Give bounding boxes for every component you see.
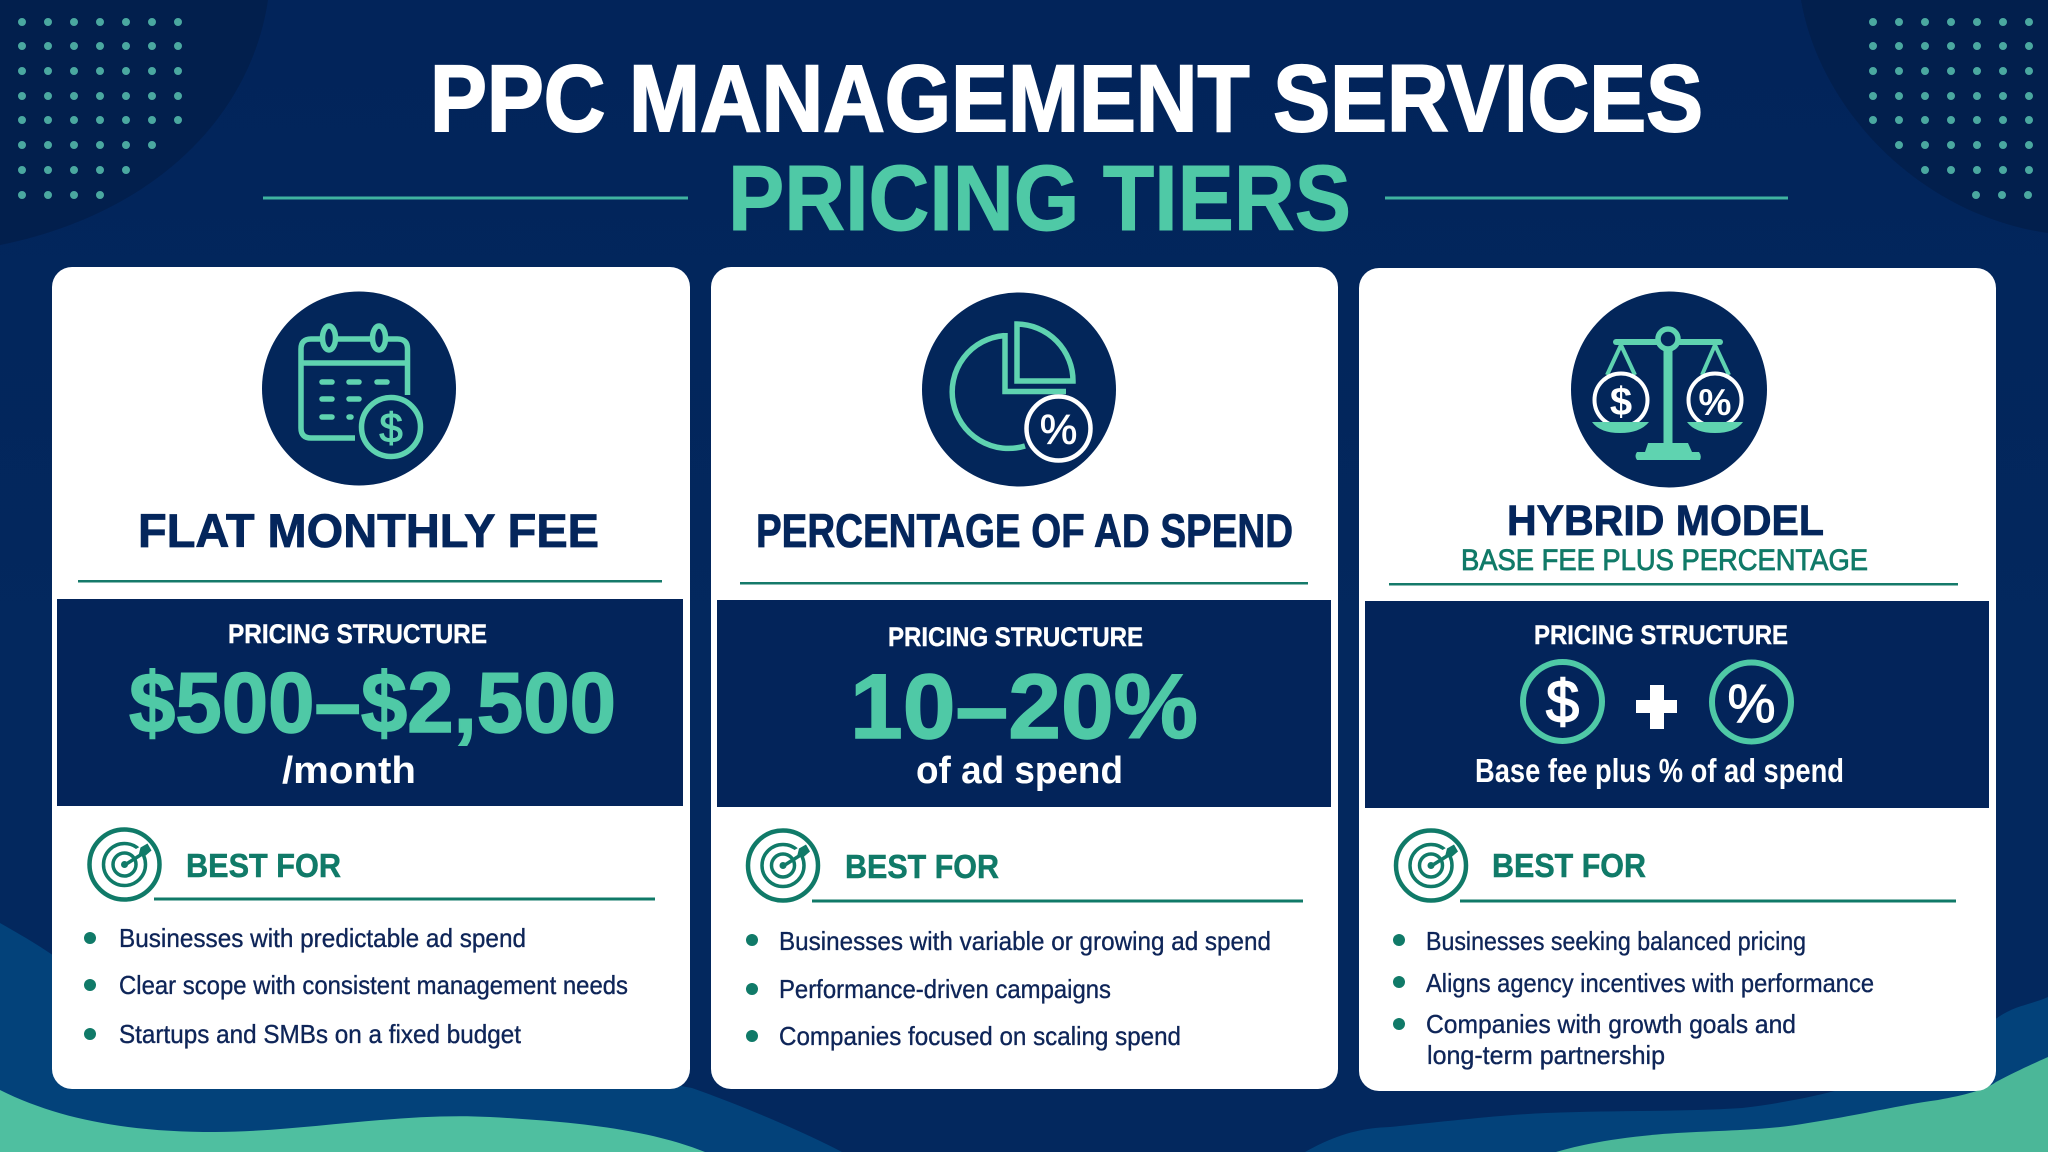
bullet list	[84, 923, 628, 1049]
pricing band: of ad spend	[916, 750, 1123, 792]
icon: plus	[1636, 685, 1677, 729]
card background	[1359, 268, 1996, 1091]
best for rule	[154, 898, 655, 900]
icon: target	[90, 830, 160, 900]
pricing band: 10–20%	[850, 656, 1198, 758]
bottom wave blue left	[0, 923, 842, 1152]
bullet list: long-term partnership	[1427, 1040, 1665, 1070]
heading: HYBRID MODEL	[1507, 497, 1824, 545]
bottom wave teal left	[0, 1090, 705, 1152]
bullet list: Companies with growth goals and	[1426, 1009, 1796, 1039]
icon: calendar with dollar: $	[379, 404, 403, 451]
bullet list: Performance-driven campaigns	[779, 974, 1111, 1004]
subtitle rule left	[263, 196, 688, 200]
panel: hybrid model	[1359, 268, 1996, 1091]
pricing band: PRICING STRUCTURE	[228, 619, 487, 649]
heading: FLAT MONTHLY FEE	[138, 504, 599, 557]
bullet list: Startups and SMBs on a fixed budget	[119, 1019, 522, 1049]
bullet list: Businesses with variable or growing ad spend	[779, 926, 1271, 956]
icon: balance scale: $	[1610, 380, 1632, 424]
bullet list: Businesses seeking balanced pricing	[1426, 926, 1806, 956]
subtitle rule right	[1385, 196, 1788, 200]
best for heading: BEST FOR	[1492, 847, 1646, 884]
card background	[52, 267, 690, 1089]
bullet list	[746, 926, 1271, 1051]
best for rule	[812, 900, 1303, 902]
pricing band	[57, 599, 683, 806]
icon: balance scale: %	[1699, 382, 1731, 423]
subtitle: PRICING TIERS	[728, 146, 1351, 250]
icon: pie chart with percent	[922, 292, 1116, 486]
bullet list: Businesses with predictable ad spend	[119, 923, 526, 953]
best for heading: BEST FOR	[186, 847, 341, 884]
pricing band	[1365, 601, 1989, 808]
decorative corner blob left	[0, 0, 268, 245]
heading rule	[1389, 583, 1958, 586]
best for rule	[1460, 900, 1956, 902]
icon: percent circle: %	[1727, 674, 1776, 734]
icon: target	[1396, 830, 1466, 900]
panel: percentage of ad spend	[711, 267, 1338, 1089]
icon: calendar with dollar	[262, 292, 456, 486]
pricing band: Base fee plus % of ad spend	[1475, 752, 1844, 789]
bullet list: Aligns agency incentives with performance	[1426, 968, 1874, 998]
subheading: BASE FEE PLUS PERCENTAGE	[1461, 544, 1868, 577]
pricing band	[717, 600, 1331, 807]
pricing band: PRICING STRUCTURE	[888, 622, 1143, 652]
icon: percent circle	[1712, 662, 1791, 742]
pricing band: $500–$2,500	[129, 656, 616, 751]
panel: flat monthly fee	[52, 267, 690, 1089]
dot grid left	[22, 22, 180, 195]
card background	[711, 267, 1338, 1089]
heading: PERCENTAGE OF AD SPEND	[756, 504, 1293, 557]
bullet list	[1393, 926, 1874, 1070]
bottom wave blue right	[1305, 997, 2048, 1152]
best for heading: BEST FOR	[845, 848, 999, 885]
dot grid right	[1873, 22, 2030, 195]
icon: dollar circle: $	[1546, 668, 1579, 735]
pricing band: PRICING STRUCTURE	[1534, 620, 1788, 650]
icon: target	[748, 830, 818, 900]
decorative corner blob right	[1801, 0, 2048, 233]
bottom wave teal right	[1556, 1057, 2048, 1152]
bullet list: Clear scope with consistent management needs	[119, 970, 628, 1000]
bullet list: Companies focused on scaling spend	[779, 1021, 1181, 1051]
heading rule	[78, 580, 662, 582]
heading rule	[740, 582, 1308, 584]
icon: dollar circle	[1523, 662, 1602, 741]
title: PPC MANAGEMENT SERVICES	[430, 46, 1703, 152]
icon: pie chart with percent: %	[1040, 406, 1077, 453]
pricing band: /month	[282, 750, 416, 792]
icon: balance scale	[1571, 292, 1767, 488]
